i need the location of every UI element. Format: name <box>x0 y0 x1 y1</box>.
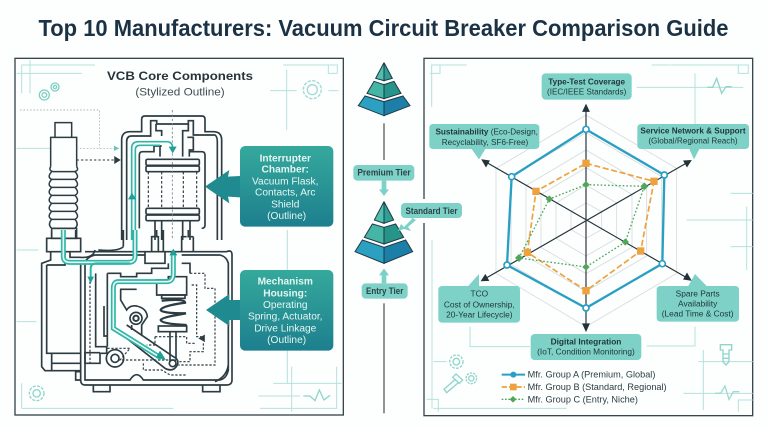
label: type-test coverage <box>542 73 632 100</box>
label: service network: (Global/Regional Reach) <box>648 137 738 146</box>
arrow: premium to pyramid <box>379 181 389 196</box>
label: type-test coverage: (IEC/IEEE Standards) <box>547 88 627 97</box>
label: entry tier <box>362 283 408 299</box>
callouts <box>205 146 333 351</box>
diagram: insulator <box>20 110 119 238</box>
panel subheading: (Stylized Outline) <box>135 86 225 98</box>
label: sustainability: Sustainability (Eco-Design, <box>435 128 538 137</box>
callout: interrupter chamber: Interrupter <box>260 153 311 164</box>
label: premium tier: Premium Tier <box>357 168 411 178</box>
label: TCO: 20-Year Lifecycle) <box>446 310 513 320</box>
legend: Mfr. Group A (Premium, Global) <box>528 370 655 380</box>
callout: interrupter chamber: (Outline) <box>267 211 306 222</box>
label: TCO: Cost of Ownership, <box>444 299 515 309</box>
legend <box>502 370 667 404</box>
callout: interrupter chamber <box>205 146 333 227</box>
connector line <box>381 123 386 160</box>
diagram: mechanism housing outline <box>42 230 232 392</box>
series: group A <box>504 126 667 311</box>
series: group B <box>524 160 658 294</box>
label: spare parts: Spare Parts <box>676 289 720 299</box>
label: digital integration <box>531 334 641 360</box>
callout: interrupter chamber: Contacts, Arc <box>255 188 315 199</box>
icon: gear bottom left <box>29 386 44 401</box>
series: group C <box>515 181 648 271</box>
flow arrows: lower teal <box>63 230 177 360</box>
label: spare parts: (Lead Time & Cost) <box>662 309 734 319</box>
callout: interrupter chamber: Chamber: <box>262 165 309 176</box>
icon: waveform bottom <box>715 386 739 399</box>
callout: mechanism housing: Housing: <box>263 289 307 300</box>
label: digital integration: (IoT, Condition Monitoring) <box>537 347 635 357</box>
label: sustainability <box>429 124 539 159</box>
callout: mechanism housing: (Outline) <box>267 335 306 346</box>
icon: waveform top <box>707 78 732 93</box>
legend: Mfr. Group B (Standard, Regional) <box>528 382 667 392</box>
label: spare parts <box>657 274 739 322</box>
panel: VCB core components <box>15 58 343 415</box>
radar grid <box>496 115 677 327</box>
icon: gear top right <box>303 81 321 99</box>
label: service network: Service Network & Support <box>640 126 746 135</box>
label: premium tier <box>353 165 414 181</box>
label: spare parts: Availability <box>678 299 718 309</box>
panel: radar chart <box>424 58 753 416</box>
label: sustainability: Recyclability, SF6-Free) <box>442 138 528 147</box>
panel: tier pyramids <box>353 63 414 413</box>
icon: waveform <box>303 390 330 401</box>
panel heading: VCB Core Components <box>107 69 253 83</box>
connector line lower <box>381 303 386 413</box>
icon: middle pyramid <box>355 202 413 263</box>
label: standard tier: Standard Tier <box>406 206 458 216</box>
icon: gears top left <box>39 83 59 100</box>
callout: mechanism housing: Operating <box>263 300 308 311</box>
diagram: interrupter chamber outline <box>122 110 222 240</box>
flow arrows: upper teal <box>128 142 177 240</box>
icon: screw <box>720 345 732 365</box>
label: entry tier: Entry Tier <box>366 286 404 296</box>
radar axes <box>482 105 691 331</box>
label: TCO: TCO <box>471 289 489 299</box>
label: TCO <box>438 274 520 323</box>
icon: top pyramid <box>358 63 410 116</box>
label: standard tier <box>398 199 462 231</box>
label: type-test coverage: Type-Test Coverage <box>548 77 625 86</box>
callout: mechanism housing: Spring, Actuator, <box>248 312 323 323</box>
callout: mechanism housing: Mechanism <box>258 277 313 288</box>
label: digital integration: Digital Integration <box>551 337 621 347</box>
callout: interrupter chamber: Vacuum Flask, <box>252 176 318 187</box>
title: Top 10 Manufacturers: Vacuum Circuit Breaker Comparison Guide <box>38 15 728 41</box>
callout: interrupter chamber: Shield <box>271 199 299 210</box>
icon: gears and bolt <box>444 355 477 393</box>
arrow: entry to pyramid <box>379 268 389 283</box>
label: service network <box>637 124 749 159</box>
legend: Mfr. Group C (Entry, Niche) <box>528 394 638 404</box>
callout: mechanism housing <box>206 270 333 351</box>
callout: mechanism housing: Drive Linkage <box>254 323 317 334</box>
